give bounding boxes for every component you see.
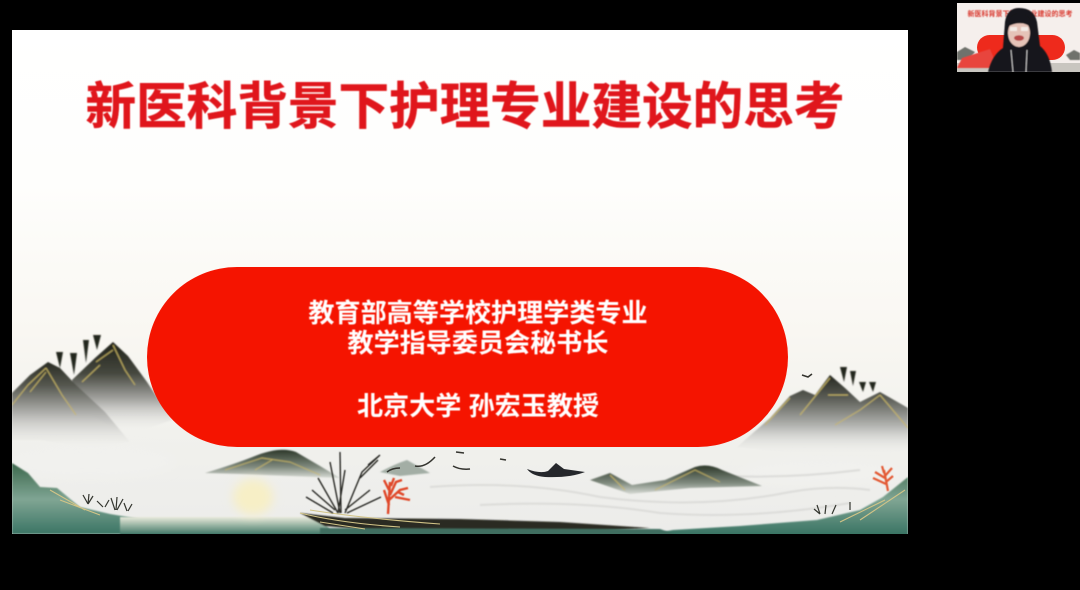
illustration: yellow glow [233, 479, 273, 515]
illustration: central hills [205, 450, 762, 494]
illustration: mist [5, 446, 900, 485]
illustration: left mountains [12, 335, 172, 448]
title: 新医科背景下护理专业建设的思考 [86, 78, 844, 135]
red pill panel [147, 267, 788, 447]
illustration: boat [527, 463, 585, 477]
illustration: bottom water strip [120, 517, 335, 536]
webcam thumbnail [957, 3, 1080, 72]
illustration: central dark bank [300, 513, 650, 531]
pill text: presenter: 北京大学 孙宏玉教授 [357, 391, 599, 421]
webcam: mini scenery [957, 47, 1080, 60]
illustration: right mountains [742, 366, 908, 444]
illustration: gold bank strokes [50, 490, 905, 529]
webcam: lower scenery [957, 63, 1080, 72]
illustration: bank water [320, 527, 668, 534]
illustration: small shrubs [83, 494, 850, 514]
webcam: mini red pill [977, 35, 1065, 60]
webcam: mini slide title: 新医科背景下护理专业建设的思考 [968, 9, 1072, 18]
webcam: red cushion [957, 49, 998, 68]
illustration: left green shore [12, 462, 134, 534]
illustration: left red coral tree [384, 478, 410, 514]
illustration: right green shore [664, 476, 908, 534]
illustration: scenery [5, 335, 908, 536]
webcam: presenter [988, 8, 1052, 72]
illustration: river mist bands [430, 470, 870, 515]
slide background [12, 30, 908, 534]
illustration: reeds [306, 452, 381, 513]
pill text: organisation: 教育部高等学校护理学类专业 [308, 298, 648, 328]
illustration: right red coral tree [873, 466, 893, 491]
pill text: role: 教学指导委员会秘书长 [348, 328, 608, 358]
illustration: birds [387, 374, 812, 472]
